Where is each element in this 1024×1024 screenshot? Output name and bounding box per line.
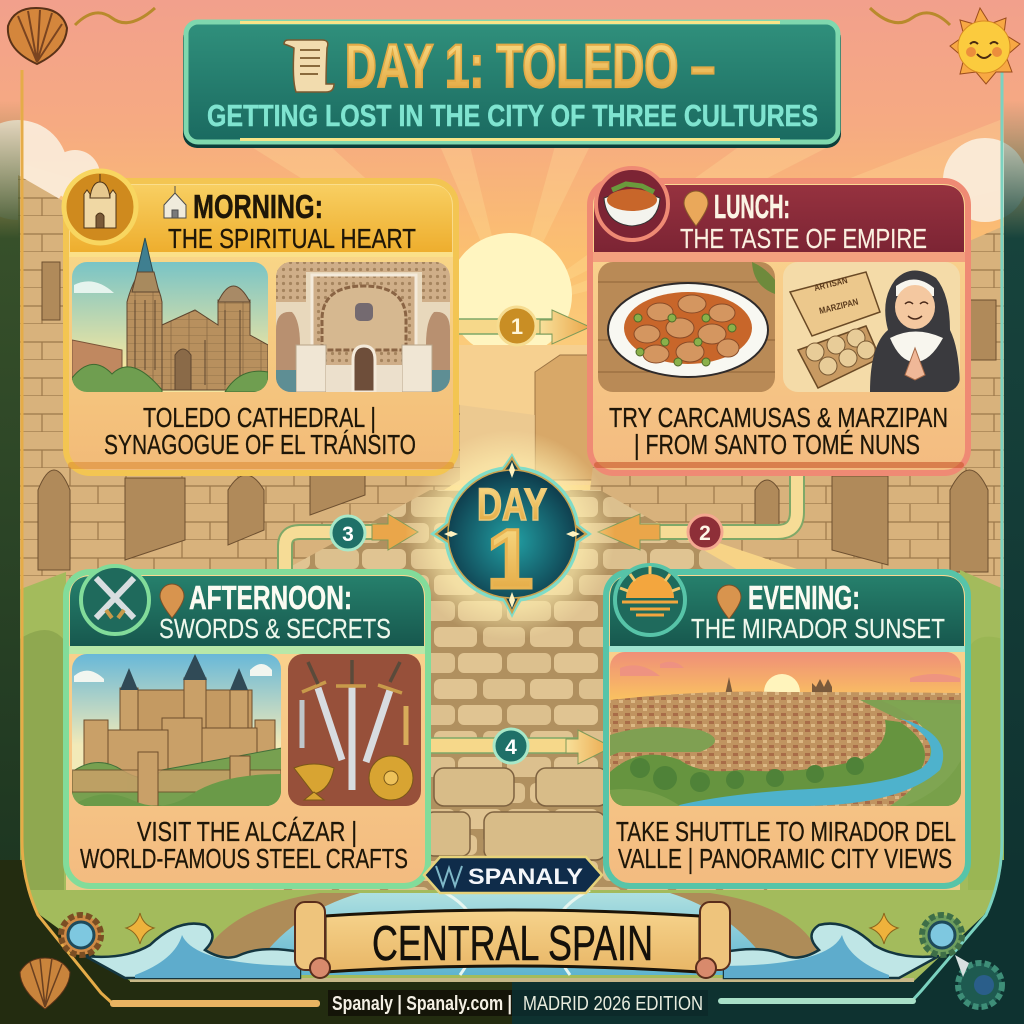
scroll banner: central spain: CENTRAL SPAIN bbox=[372, 917, 653, 971]
spanaly logo badge: SPANALY bbox=[468, 864, 583, 889]
text: afternoon description bbox=[80, 816, 408, 874]
arrow 3: afternoon to day badge: 3 bbox=[342, 523, 354, 546]
panel: morning bbox=[64, 171, 456, 473]
icon: right gold star bbox=[870, 913, 898, 944]
scroll banner: central spain bbox=[295, 902, 730, 978]
footer credit line: MADRID 2026 EDITION bbox=[523, 993, 703, 1015]
icon: smiling sun top-right bbox=[950, 8, 1020, 84]
text: afternoon description: WORLD-FAMOUS STEEL CRAFTS bbox=[80, 843, 408, 874]
image: marzipan box and nun: ARTISAN bbox=[813, 275, 848, 293]
arrow 3: afternoon to day badge bbox=[285, 514, 418, 574]
subheading: the mirador sunset: THE MIRADOR SUNSET bbox=[691, 613, 945, 644]
image: marzipan box and nun bbox=[783, 262, 960, 392]
arrow 4: afternoon to evening bbox=[428, 729, 612, 764]
subheading: GETTING LOST IN THE CITY OF THREE CULTURES bbox=[207, 98, 818, 133]
text: lunch description bbox=[609, 402, 948, 460]
central day 1 badge: 1 bbox=[487, 512, 533, 606]
text: evening description bbox=[616, 816, 956, 874]
image: toledo cathedral bbox=[72, 238, 268, 402]
panel: afternoon bbox=[66, 566, 428, 886]
spanaly logo badge bbox=[424, 857, 602, 893]
icon: left gear bbox=[61, 915, 101, 955]
arrow 1: morning to lunch: 1 bbox=[511, 314, 523, 339]
image: synagogue arch bbox=[276, 262, 450, 392]
footer credit line bbox=[328, 990, 708, 1016]
image: carcamusas plate bbox=[598, 262, 775, 392]
heading: afternoon: AFTERNOON: bbox=[189, 579, 352, 616]
icon: parchment scroll bbox=[284, 40, 334, 92]
footer credit line: Spanaly | Spanaly.com | bbox=[332, 993, 512, 1015]
text: morning description: SYNAGOGUE OF EL TRÁNSITO bbox=[104, 429, 416, 460]
arrow 2: lunch to day badge: 2 bbox=[699, 522, 711, 545]
icon: evening map pin bbox=[717, 585, 741, 619]
text: morning description: TOLEDO CATHEDRAL | bbox=[143, 402, 376, 433]
heading: day 1 toledo: DAY 1: TOLEDO – bbox=[345, 32, 715, 100]
title banner bbox=[183, 21, 841, 148]
text: afternoon description: VISIT THE ALCÁZAR | bbox=[137, 816, 357, 847]
heading: morning: MORNING: bbox=[193, 188, 323, 225]
image: mirador panorama bbox=[610, 652, 961, 806]
icon: afternoon map pin bbox=[160, 584, 184, 618]
decorative waves bbox=[85, 924, 939, 978]
icon: bottom-left shell bbox=[20, 958, 70, 1009]
icon: stew bowl badge bbox=[596, 168, 668, 240]
heading: evening: EVENING: bbox=[748, 579, 860, 616]
icon: bottom-right gear bbox=[955, 955, 1002, 1007]
panel: lunch bbox=[590, 168, 968, 473]
text: morning description bbox=[104, 402, 416, 460]
icon: crossed swords badge bbox=[81, 566, 149, 634]
image: alcazar fortress bbox=[72, 654, 282, 806]
arrow 4: afternoon to evening: 4 bbox=[505, 736, 517, 759]
icon: sunset badge bbox=[615, 565, 685, 635]
icon: right gear bbox=[922, 915, 962, 955]
icon: scallop shell top-left bbox=[8, 8, 67, 64]
arrow 2: lunch to day badge bbox=[598, 470, 797, 550]
arrow 1: morning to lunch bbox=[456, 307, 590, 345]
subheading: the taste of empire: THE TASTE OF EMPIRE bbox=[680, 223, 927, 254]
panel: evening bbox=[606, 565, 968, 886]
subheading: the spiritual heart: THE SPIRITUAL HEART bbox=[168, 223, 416, 254]
subheading: swords and secrets: SWORDS & SECRETS bbox=[159, 613, 391, 644]
central day 1 badge: DAY bbox=[477, 479, 547, 530]
icon: left gold star bbox=[126, 913, 154, 944]
text: lunch description: | FROM SANTO TOMÉ NUNS bbox=[634, 429, 920, 460]
image: toledo steel swords bbox=[288, 654, 421, 806]
heading: lunch: LUNCH: bbox=[714, 188, 790, 225]
icon: lunch map pin bbox=[684, 191, 708, 226]
image: marzipan box and nun: MARZIPAN bbox=[818, 297, 859, 316]
icon: cathedral badge bbox=[64, 171, 136, 243]
icon: chapel bbox=[164, 186, 186, 218]
central day 1 badge bbox=[405, 430, 615, 640]
